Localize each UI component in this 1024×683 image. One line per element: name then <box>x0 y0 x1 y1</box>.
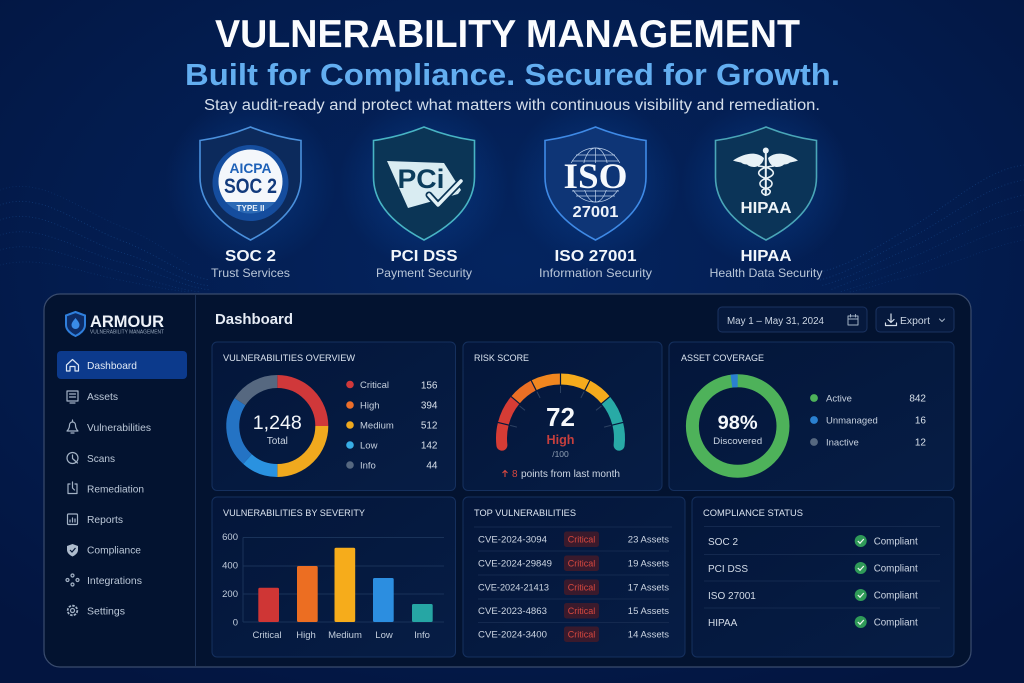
legend <box>346 380 438 472</box>
nav: Remediation <box>68 482 144 496</box>
bar chart: 600 <box>222 532 238 543</box>
legend <box>810 394 926 448</box>
shield: HIPAA <box>716 127 816 240</box>
label: SOC 2: SOC 2 <box>225 248 276 265</box>
nav: Dashboard (active): Dashboard <box>87 360 137 372</box>
logo text: HIPAA: HIPAA <box>740 200 792 217</box>
logo: Armour: ARMOUR <box>90 313 164 331</box>
nav: Settings: Settings <box>87 606 125 618</box>
donut caption: Discovered <box>713 436 762 447</box>
badge: ISO 27001 <box>528 107 663 280</box>
bar chart: 0 <box>233 618 238 628</box>
nav: Settings <box>68 606 125 618</box>
donut total: 1,248 <box>253 413 302 434</box>
row: SOC 2: Compliant <box>874 536 918 548</box>
row: PCI DSS: PCI DSS <box>708 564 748 575</box>
nav: Vulnerabilities <box>67 420 151 434</box>
row: CVE-2024-3094 <box>478 532 669 547</box>
heading: COMPLIANCE STATUS <box>703 508 803 519</box>
heading: VULNERABILITIES BY SEVERITY <box>223 508 366 519</box>
export button <box>876 307 954 332</box>
row: CVE-2024-29849: Critical <box>568 558 595 568</box>
bar chart: Low <box>375 630 393 641</box>
dashboard panel <box>44 294 971 667</box>
globe <box>568 148 622 202</box>
nav: Dashboard (active) <box>57 351 187 379</box>
score change: points from last month <box>521 469 620 480</box>
nav: Reports <box>68 514 123 526</box>
row: CVE-2024-3400: CVE-2024-3400 <box>478 630 547 640</box>
row: ISO 27001: ISO 27001 <box>708 591 756 602</box>
row: CVE-2024-3094: 23 Assets <box>628 534 669 546</box>
sidebar <box>57 312 187 618</box>
legend: High <box>360 400 380 412</box>
seal: AICPA SOC 2 Type II: TYPE II <box>236 203 264 213</box>
bar chart: High <box>296 630 316 641</box>
bar chart: 400 <box>222 560 238 572</box>
logo: Armour: VULNERABILITY MANAGEMENT <box>90 330 164 336</box>
heading: Dashboard: Dashboard <box>215 311 293 328</box>
panel: vulnerabilities overview <box>212 342 456 490</box>
row: HIPAA <box>708 616 918 629</box>
donut value: 98% <box>718 413 758 434</box>
row: CVE-2024-21413: Critical <box>568 582 595 592</box>
logo: ISO: ISO <box>564 156 628 196</box>
badge: PCI DSS <box>339 98 509 280</box>
gauge <box>497 373 624 445</box>
row: CVE-2024-29849 <box>478 556 669 571</box>
row: CVE-2023-4863: Critical <box>568 606 595 616</box>
sublabel: Health Data Security: Health Data Security <box>710 266 822 280</box>
heading: VULNERABILITIES OVERVIEW <box>223 353 355 364</box>
nav: Scans <box>67 452 115 465</box>
row: CVE-2023-4863 <box>478 603 669 618</box>
logo: PCI <box>387 161 461 208</box>
row: PCI DSS: Compliant <box>874 564 918 574</box>
row: CVE-2024-3400: 14 Assets <box>628 630 669 640</box>
row: CVE-2023-4863: CVE-2023-4863 <box>478 606 547 617</box>
tagline: Stay audit-ready and protect what matters with continuous visibility and remediation. <box>204 97 820 114</box>
row: ISO 27001: Compliant <box>874 590 918 602</box>
nav: Assets <box>67 391 118 403</box>
seal: AICPA SOC 2 Type II: AICPA <box>230 160 272 176</box>
row: CVE-2024-3400 <box>478 626 669 642</box>
bar chart <box>222 532 444 641</box>
score level: High <box>546 432 575 447</box>
panel: top vulnerabilities <box>463 497 685 657</box>
nav: Vulnerabilities: Vulnerabilities <box>87 422 151 434</box>
panel: asset coverage <box>669 342 954 490</box>
legend: 44 <box>426 460 438 472</box>
label: HIPAA: HIPAA <box>740 248 792 265</box>
bar chart: Critical <box>252 630 282 641</box>
label: PCI DSS: PCI DSS <box>390 248 458 265</box>
logo: Armour <box>66 312 164 336</box>
legend: 512 <box>421 420 438 432</box>
bar chart: Medium <box>328 630 362 641</box>
row: CVE-2024-29849: 19 Assets <box>628 558 669 570</box>
donut chart <box>233 382 322 471</box>
date picker <box>718 307 867 332</box>
donut chart <box>692 381 783 471</box>
nav: Integrations <box>66 574 142 587</box>
legend: 394 <box>421 400 438 412</box>
legend: Info <box>360 460 376 472</box>
date picker: May 1 – May 31, 2024 <box>727 316 824 327</box>
shield: SOC 2 <box>200 127 301 240</box>
panel: vulnerabilities by severity <box>212 497 456 657</box>
sublabel: Information Security: Information Security <box>539 266 652 280</box>
row: PCI DSS <box>708 562 918 575</box>
nav: Compliance: Compliance <box>87 544 141 556</box>
badge: HIPAA <box>681 98 851 280</box>
export button: Export <box>900 315 930 327</box>
nav: Scans: Scans <box>87 453 115 465</box>
sublabel: Payment Security: Payment Security <box>376 266 472 280</box>
row: ISO 27001 <box>708 589 918 602</box>
nav: Remediation: Remediation <box>87 484 144 496</box>
row: CVE-2024-3094: CVE-2024-3094 <box>478 534 547 546</box>
seal: AICPA SOC 2 Type II <box>212 145 288 221</box>
heading: ASSET COVERAGE <box>681 353 764 364</box>
row: CVE-2024-3400: Critical <box>568 630 595 640</box>
row: CVE-2024-3094: Critical <box>568 534 595 544</box>
sublabel: Trust Services: Trust Services <box>211 266 290 280</box>
nav: Assets: Assets <box>87 391 118 403</box>
label: ISO 27001: ISO 27001 <box>554 248 637 265</box>
title: VULNERABILITY MANAGEMENT <box>215 13 800 56</box>
score scale: /100 <box>552 449 569 459</box>
row: CVE-2024-29849: CVE-2024-29849 <box>478 558 552 570</box>
badge: SOC 2 <box>182 107 318 277</box>
legend: Medium <box>360 420 394 432</box>
heading: TOP VULNERABILITIES <box>474 508 576 519</box>
legend: Critical <box>360 380 389 391</box>
panel: compliance status <box>692 497 954 657</box>
code: 27001: 27001 <box>572 204 619 221</box>
legend: Low <box>360 440 378 452</box>
legend: 156 <box>421 380 438 392</box>
row: CVE-2024-21413: 17 Assets <box>628 582 669 594</box>
row: CVE-2024-21413 <box>478 580 669 595</box>
legend: 16 <box>915 416 926 426</box>
row: CVE-2024-21413: CVE-2024-21413 <box>478 582 549 594</box>
legend: 142 <box>421 440 438 452</box>
nav: Integrations: Integrations <box>87 575 142 587</box>
heading: RISK SCORE <box>474 353 529 364</box>
legend: 12 <box>915 438 926 448</box>
row: SOC 2 <box>708 535 918 548</box>
nav: Reports: Reports <box>87 514 123 526</box>
row: HIPAA: Compliant <box>874 618 918 628</box>
legend: Unmanaged <box>826 416 878 426</box>
logo: PCI: PCi <box>398 164 444 194</box>
donut caption: Total <box>267 436 288 447</box>
score value: 72 <box>546 402 575 432</box>
legend: 842 <box>909 394 926 404</box>
icon: caduceus <box>733 148 798 196</box>
row: HIPAA: HIPAA <box>708 618 738 629</box>
legend: Inactive <box>826 438 859 448</box>
score change: 8 <box>512 469 518 480</box>
legend: Active <box>826 394 852 404</box>
panel: risk score <box>463 342 662 490</box>
row: CVE-2023-4863: 15 Assets <box>628 606 669 617</box>
subtitle: Built for Compliance. Secured for Growth. <box>185 57 840 92</box>
bar chart: Info <box>414 630 430 641</box>
row: SOC 2: SOC 2 <box>708 537 738 548</box>
shield: ISO <box>545 127 646 240</box>
seal: AICPA SOC 2 Type II: SOC 2 <box>224 175 277 198</box>
bar chart: 200 <box>222 589 238 600</box>
decorative dotted waves <box>0 165 1024 292</box>
nav: Compliance <box>67 544 141 556</box>
shield: PCI <box>374 127 474 240</box>
